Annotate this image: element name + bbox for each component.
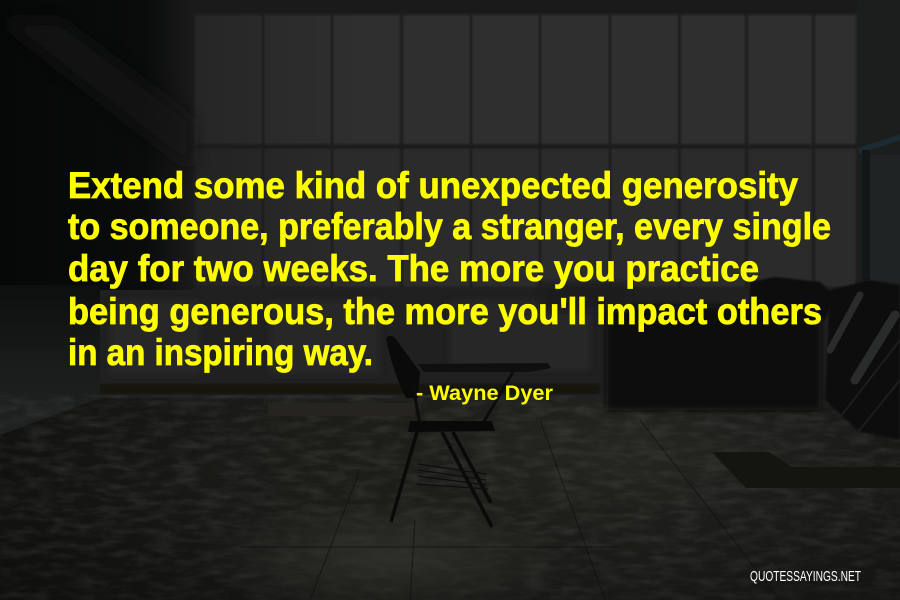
floor patch — [712, 452, 900, 488]
chair seat — [408, 421, 495, 432]
chair back — [386, 336, 420, 398]
chair — [386, 336, 551, 527]
chair legs — [391, 432, 492, 527]
ceiling band — [0, 0, 900, 16]
dark furniture on the right — [540, 277, 900, 440]
quote text: being generous, the more you'll impact others — [68, 291, 822, 332]
floor — [0, 398, 900, 600]
chair writing tablet — [418, 363, 551, 372]
quote text: Extend some kind of unexpected generosity — [68, 165, 798, 206]
window wall — [192, 10, 859, 290]
wall below the window — [95, 288, 858, 400]
right wall — [858, 0, 900, 600]
floor seams — [95, 420, 780, 600]
attribution: - Wayne Dyer — [416, 382, 553, 405]
left wall — [0, 0, 193, 435]
quote text: day for two weeks. The more you practice — [68, 248, 759, 289]
quote text — [68, 165, 831, 373]
quote text: to someone, preferably a stranger, every single — [68, 206, 831, 247]
chair book rack — [416, 464, 488, 489]
rubble line at wall base — [100, 384, 600, 394]
quote text: in an inspiring way. — [68, 332, 373, 373]
